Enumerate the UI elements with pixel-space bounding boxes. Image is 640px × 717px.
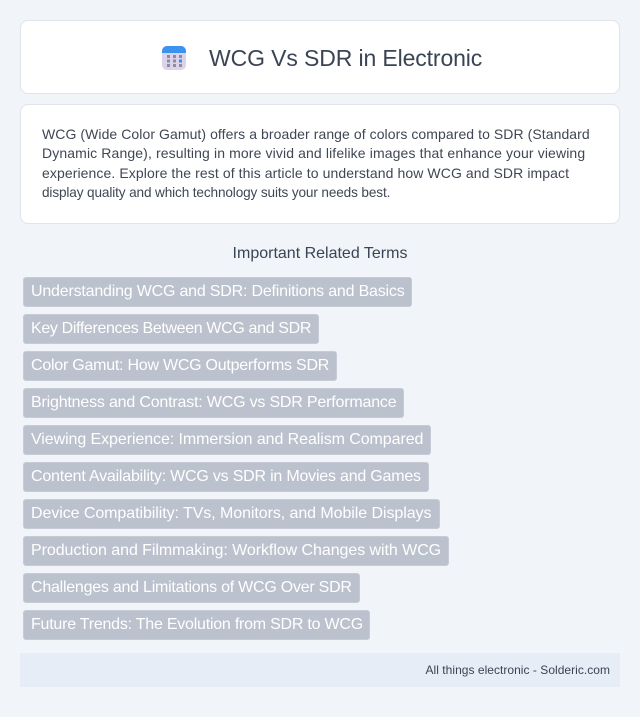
term 1 [23,277,412,307]
intro paragraph: Dynamic Range), resulting in more vivid and lifelike images that enhance your viewing [42,145,585,161]
intro paragraph [42,126,590,200]
term 9: Challenges and Limitations of WCG Over SDR [31,579,352,596]
intro paragraph: experience. Explore the rest of this article to understand how WCG and SDR impact [42,165,569,181]
term 3 [23,351,337,381]
intro paragraph: display quality and which technology suits your needs best. [42,185,390,200]
term 1: Understanding WCG and SDR: Definitions and Basics [31,283,404,300]
term 6 [23,462,429,492]
term 7: Device Compatibility: TVs, Monitors, and Mobile Displays [31,505,431,522]
icon: calendar [162,46,186,70]
section heading: Important Related Terms [233,245,407,262]
term 8 [23,536,449,566]
term 4 [23,388,404,418]
term 5: Viewing Experience: Immersion and Realism Compared [31,431,423,448]
term 2: Key Differences Between WCG and SDR [31,320,311,337]
term 10 [23,610,370,640]
header card [20,20,620,94]
term 9 [23,573,360,603]
term 7 [23,499,440,529]
term 10: Future Trends: The Evolution from SDR to WCG [31,616,363,633]
title: WCG Vs SDR in Electronic [209,45,482,71]
term 4: Brightness and Contrast: WCG vs SDR Performance [31,394,396,411]
intro paragraph: WCG (Wide Color Gamut) offers a broader range of colors compared to SDR (Standard [42,126,590,142]
term 3: Color Gamut: How WCG Outperforms SDR [31,357,329,374]
intro text panel [20,104,620,224]
footer bar [20,653,620,687]
term 8: Production and Filmmaking: Workflow Changes with WCG [31,542,441,559]
term 6: Content Availability: WCG vs SDR in Movies and Games [31,468,421,485]
term 2 [23,314,319,344]
footer credit: All things electronic - Solderic.com [426,663,610,677]
term 5 [23,425,431,455]
